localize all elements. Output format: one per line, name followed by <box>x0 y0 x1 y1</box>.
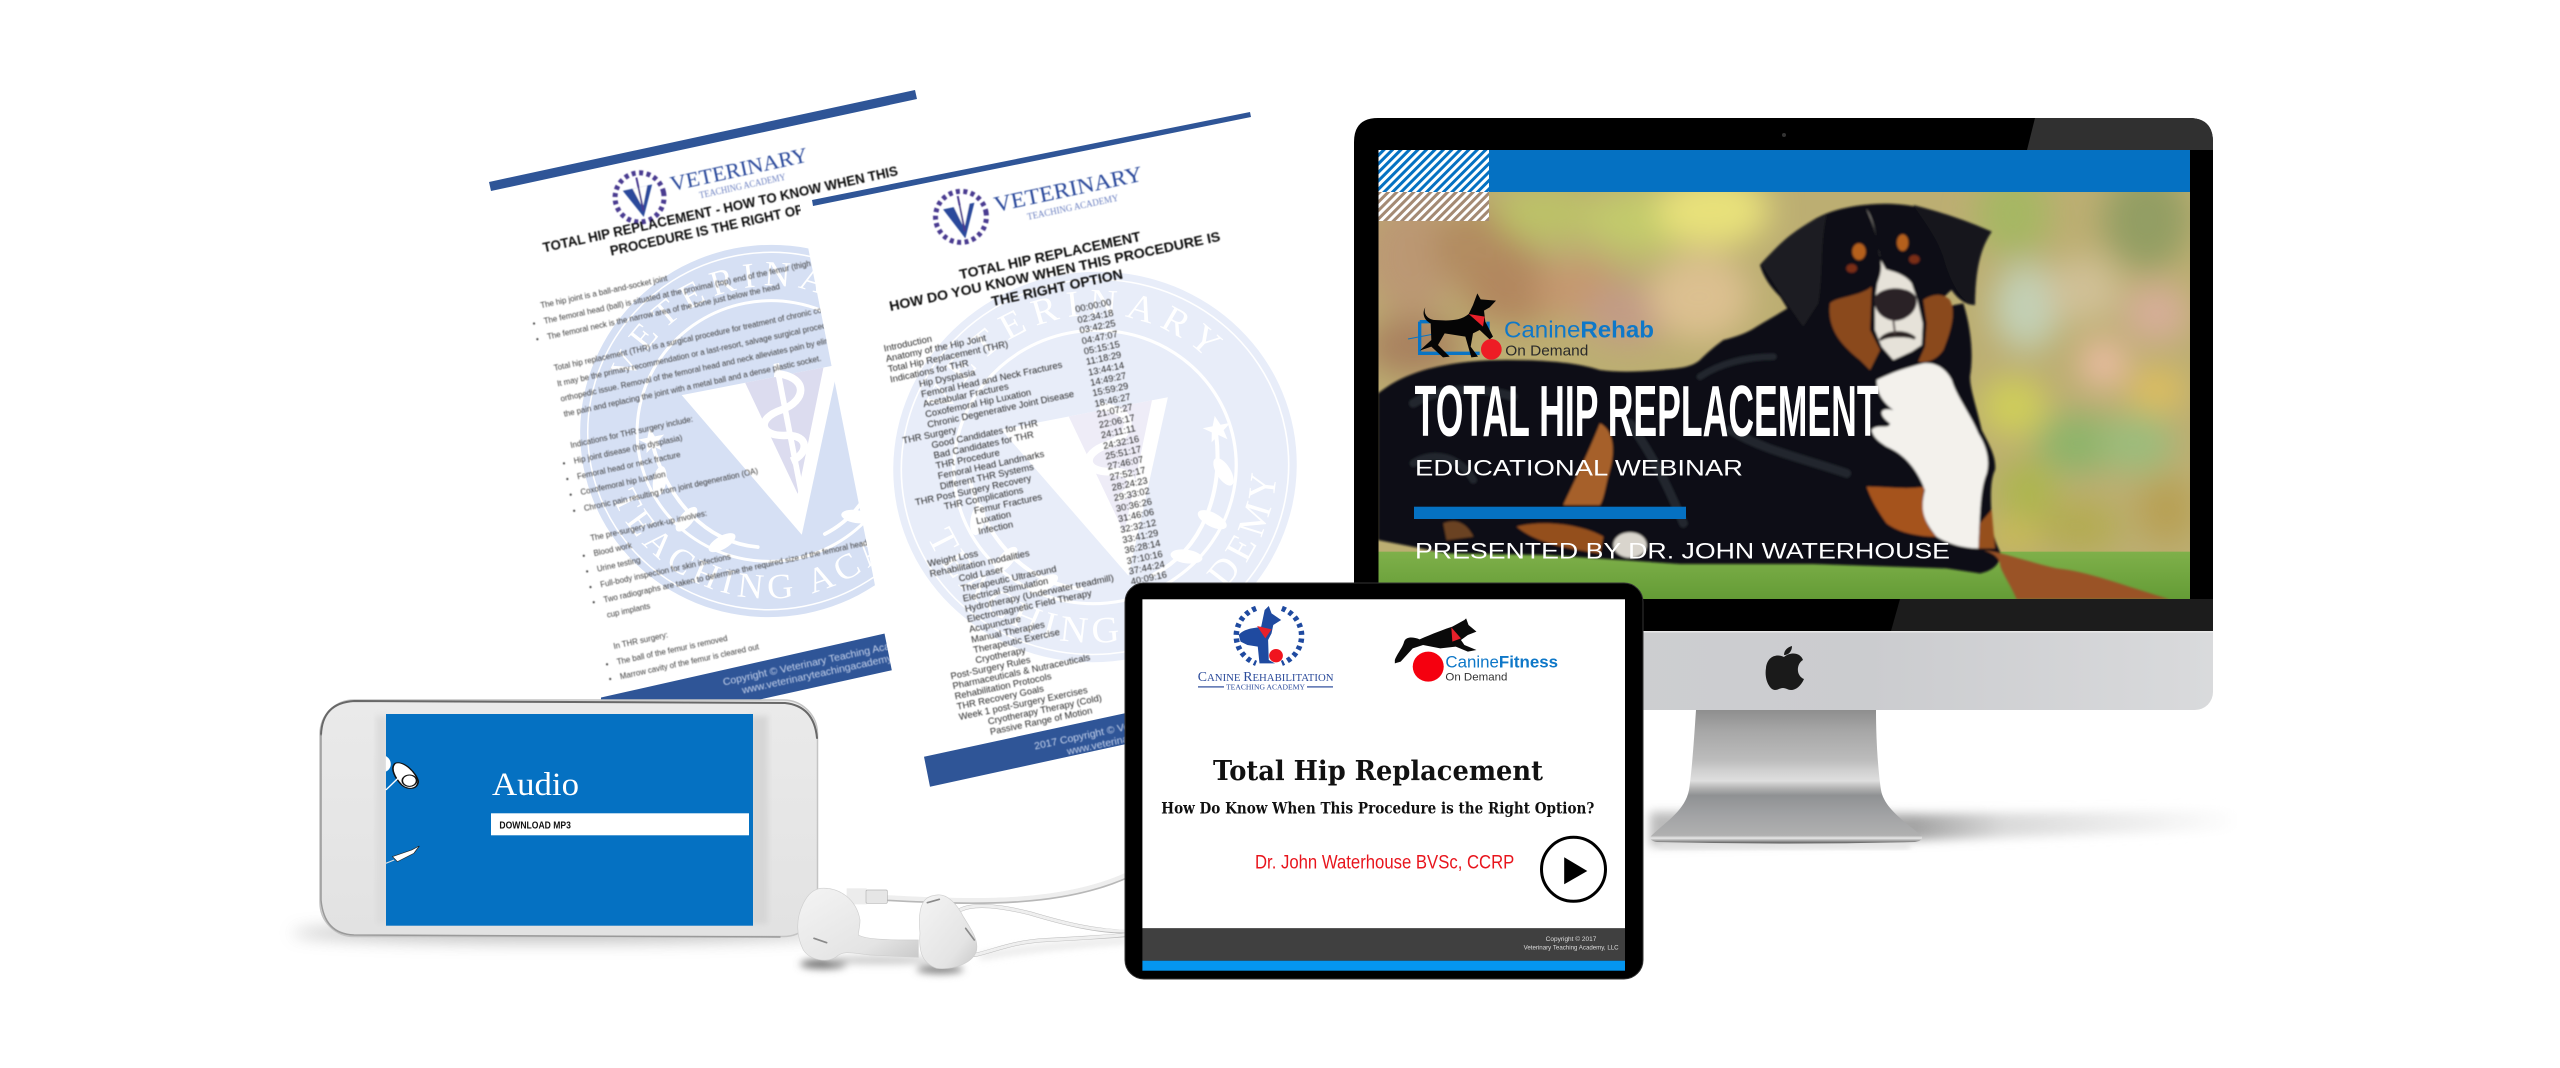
copyright text: Copyright © 2017 <box>1546 935 1597 943</box>
document 2 timecodes: 15:59:29 <box>1091 380 1129 398</box>
document 2 title: HOW DO YOU KNOW WHEN THIS PROCEDURE IS <box>888 228 1222 314</box>
download button: DOWNLOAD MP3 <box>499 820 571 831</box>
monitor stand <box>1651 710 1922 844</box>
CanineRehab logo <box>1408 293 1654 360</box>
document 1 body copy <box>528 227 961 684</box>
document 1 body copy: Hip joint disease (hip dysplasia) <box>573 433 684 466</box>
document 1 body copy: • <box>582 551 586 560</box>
document 1 body copy: the pain and replacing the joint with a metal ball and a dense plastic socket. <box>563 354 822 419</box>
document 1 body copy: • <box>608 674 613 684</box>
document 2 chapter list: Luxation <box>975 508 1012 526</box>
copyright text: Veterinary Teaching Academy, LLC <box>1524 944 1619 951</box>
chest tan <box>1867 487 1937 537</box>
grass <box>1379 552 2190 599</box>
document 1 body copy: • <box>568 490 573 500</box>
document 1 body copy: Two radiographs are taken to determine the required size of the femoral head and <box>603 535 883 605</box>
document 2 chapter list: Indications for THR <box>889 357 970 384</box>
document 1 body copy: • <box>588 582 593 592</box>
document 2 chapter list: Cryotherapy <box>974 644 1027 665</box>
document 2 chapter list: Chronic Degenerative Joint Disease <box>926 388 1075 430</box>
document 2 chapter list: Different THR Systems <box>939 461 1035 491</box>
desktop monitor: TOTAL HIP REPLACEMENT <box>1415 372 1879 452</box>
document 2 chapter list: THR Recovery Goals <box>956 683 1045 712</box>
document 2 chapter list: Femoral Head Landmarks <box>937 448 1045 481</box>
document 1 title: PROCEDURE IS THE RIGHT OP <box>608 201 805 259</box>
monitor chin <box>1354 560 2213 710</box>
document 2 chapter list: THR Procedure <box>935 447 1001 471</box>
logo mark <box>1408 293 1502 360</box>
document 2 chapter list: Bad Candidates for THR <box>932 429 1035 461</box>
eyebrows <box>1852 243 1866 260</box>
document 2 timecodes: 40:09:16 <box>1130 569 1168 587</box>
play button <box>1542 837 1606 901</box>
document 2 timecodes: 27:52:17 <box>1108 464 1146 482</box>
document 1 body copy: • <box>535 334 540 344</box>
presenter line: PRESENTED BY DR. JOHN WATERHOUSE <box>1415 538 1950 563</box>
document 2 timecodes: 29:33:02 <box>1113 485 1151 503</box>
document 1 body copy: The pre-surgery work-up involves: <box>589 509 708 543</box>
tablet with webinar title slide <box>1125 583 1643 979</box>
document 2 timecodes: 33:41:29 <box>1121 527 1159 545</box>
earphones <box>798 874 1128 973</box>
document 2 timecodes: 37:44:24 <box>1128 558 1166 577</box>
document 1 body copy: Full-body inspection for skin infections <box>599 552 732 589</box>
document 2 chapter list: Therapeutic Ultrasound <box>960 563 1057 594</box>
document 1 title: TOTAL HIP REPLACEMENT - HOW TO KNOW WHEN THIS <box>541 163 899 256</box>
apple logo <box>1766 646 1804 690</box>
document 1 body copy: Blood work <box>593 541 633 558</box>
document 2 chapter list: Femur Fractures <box>973 491 1043 516</box>
document 2 chapter list: Femoral Head and Neck Fractures <box>920 358 1063 399</box>
document 2 chapter list: Electromagnetic Field Therapy <box>966 587 1093 624</box>
document 2 title: THE RIGHT OPTION <box>990 266 1124 309</box>
document 1 logo wordmark: VETERINARY <box>668 143 810 196</box>
dog body <box>1378 302 2002 575</box>
right earbud <box>919 895 977 969</box>
document 1 top bar <box>489 90 917 191</box>
logo wordmark: CanineRehab <box>1504 317 1654 343</box>
document 2 chapter list: Weight Loss <box>926 547 979 569</box>
document 2 chapter list: Passive Range of Motion <box>989 704 1093 737</box>
blue top banner <box>1378 150 2190 192</box>
document 1 body copy: • <box>605 660 610 669</box>
presenter name: Dr. John Waterhouse BVSc, CCRP <box>1255 852 1514 873</box>
document 1 footer text: Copyright © Veterinary Teaching Academy LLC <box>722 630 938 689</box>
screen subtitle: EDUCATIONAL WEBINAR <box>1415 456 1743 480</box>
document 2 chapter list: THR Complications <box>943 484 1025 512</box>
document 1 logo emblem <box>610 168 669 227</box>
white blaze and muzzle <box>1866 208 1923 360</box>
white chest <box>1872 363 1988 548</box>
document 1 body copy: • <box>585 567 590 576</box>
document 2 chapter list: Cold Laser <box>958 563 1004 583</box>
document 2 watermark seal: TEACHING ACADEMY <box>930 473 1276 642</box>
smartphone with audio screen <box>292 700 828 942</box>
copyright text <box>1524 935 1619 951</box>
document 2 chapter list: THR Surgery <box>901 424 957 446</box>
document 1 body copy: cup implants <box>606 601 651 620</box>
document 2 chapter list: Acupuncture <box>968 613 1022 635</box>
document 2 chapter list: Coxofemoral Hip Luxation <box>924 386 1032 420</box>
dog figure <box>1378 204 2170 599</box>
document 1 body copy: Indications for THR surgery include: <box>570 415 694 450</box>
document 2 timecodes: 03:42:25 <box>1079 317 1116 336</box>
document 2 chapter list: Electrical Stimulation <box>962 575 1049 604</box>
document 1 body copy: It may be the primary recommendation or a last-resort, salvage surgical procedure for <box>556 316 850 388</box>
document 2 chapter list <box>883 306 1140 743</box>
document 1: total hip replacement notes <box>489 90 938 700</box>
tablet footer bar <box>1142 928 1625 961</box>
document 2 timecodes: 21:07:27 <box>1096 401 1134 419</box>
logo tagline: On Demand <box>1505 343 1588 360</box>
camera dot <box>1782 133 1786 137</box>
document 2 logo subtitle: TEACHING ACADEMY <box>1027 194 1120 223</box>
document 1 body copy: Urine testing <box>596 555 641 574</box>
document 2 chapter list: THR Post Surgery Recovery <box>914 472 1032 507</box>
document 2 timecodes: 31:46:06 <box>1117 506 1155 524</box>
document 2 chapter list: Cryotherapy Therapy (Cold) <box>987 692 1103 727</box>
striped corner accent <box>1378 150 1489 221</box>
document 2 chapter list: Good Candidates for THR <box>930 417 1039 450</box>
document 1 body copy: Marrow cavity of the femur is cleared out <box>619 642 761 681</box>
left ear <box>1762 215 1827 327</box>
document 2 timecodes: 13:44:14 <box>1087 359 1125 378</box>
document 1 watermark seal: VETERINARY <box>610 262 817 371</box>
desktop monitor <box>1354 118 2240 849</box>
phone body <box>320 700 818 936</box>
document 2 footer band <box>924 710 1140 787</box>
phone inner shading <box>376 716 768 924</box>
document 1 body copy: • <box>532 319 537 328</box>
phone screen <box>386 714 753 926</box>
crest subtitle: TEACHING ACADEMY <box>1226 682 1306 692</box>
document 2 footer text: 2017 Copyright © Veterinary Teaching Academy <box>1033 694 1254 753</box>
document 2 chapter list: Pharmaceuticals & Nutraceuticals <box>952 651 1091 691</box>
nose <box>1874 288 1917 321</box>
crest name: CANINE REHABILITATION <box>1198 669 1334 684</box>
document 1 body copy: • <box>572 506 577 515</box>
hind leg tan <box>1563 423 1613 505</box>
document 2 chapter list: Acetabular Fractures <box>922 380 1010 409</box>
document 1 body copy: The ball of the femur is removed <box>616 634 728 667</box>
canine fitness logo <box>1395 618 1558 684</box>
document 1 body copy: The femoral head (ball) is situated at the proximal (top) end of the femur (thigh bone) <box>543 254 834 326</box>
document 2 title: TOTAL HIP REPLACEMENT <box>958 228 1142 282</box>
document 1 body copy: The hip joint is a ball-and-socket joint <box>540 273 669 310</box>
document 2: webinar outline <box>800 112 1297 787</box>
document 1 body copy: Coxofemoral hip luxation <box>580 470 666 497</box>
tan cheeks <box>1830 287 1880 370</box>
document 2 timecodes: 32:32:12 <box>1119 516 1157 535</box>
document 2 timecodes: 37:10:16 <box>1126 548 1164 566</box>
document 2 timecodes: 04:47:07 <box>1081 328 1119 346</box>
document 2 title <box>884 212 1225 330</box>
document 2 timecodes: 14:49:27 <box>1089 370 1127 388</box>
document 1 body copy: Total hip replacement (THR) is a surgical procedure for treatment of chronic coxofemoral <box>553 298 856 373</box>
right ear <box>1913 205 1992 305</box>
document 2 timecodes: 27:46:07 <box>1106 453 1144 472</box>
monitor screen photo: dog in meadow <box>1378 192 2190 599</box>
tablet screen <box>1142 599 1625 928</box>
document 2 timecodes: 18:46:27 <box>1093 391 1131 409</box>
document 2 top bar <box>812 112 1251 206</box>
slide subtitle: How Do Know When This Procedure is the Right Option? <box>1161 798 1594 817</box>
document 2 timecodes: 30:36:26 <box>1115 495 1153 514</box>
document 2 chapter list: Rehabilitation Protocols <box>954 670 1053 702</box>
document 2 chapter list: Therapeutic Exercise <box>972 626 1061 655</box>
front leg <box>1983 550 2170 599</box>
document 2 timecodes: 25:51:17 <box>1104 443 1142 461</box>
document 1 footer band <box>600 633 893 735</box>
document 1 body copy: • <box>591 598 596 607</box>
document 2 timecodes: 28:24:23 <box>1111 474 1149 493</box>
document 2 timecodes: 11:18:29 <box>1085 349 1122 367</box>
document 2 chapter list: Manual Therapies <box>970 618 1046 645</box>
document 2 timecodes: 36:28:14 <box>1123 537 1161 556</box>
earbud illustrations on screen <box>386 756 419 863</box>
document 1 text content <box>506 118 990 684</box>
document 2 chapter list: Anatomy of the Hip Joint <box>885 332 987 364</box>
document 2 timecodes: 05:15:15 <box>1083 338 1121 357</box>
crest <box>1236 606 1302 663</box>
document 2 chapter list: Post-Surgery Rules <box>949 653 1032 681</box>
document 2 timecodes: 24:32:16 <box>1102 433 1140 451</box>
slide title: Total Hip Replacement <box>1213 756 1543 787</box>
document 2 timecodes: 24:11:11 <box>1100 422 1136 440</box>
document 1 watermark seal: TEACHING ACADEMY <box>614 486 871 598</box>
document 2 chapter list: Total Hip Replacement (THR) <box>887 338 1009 374</box>
monitor shadow <box>1650 810 2240 849</box>
document 2 chapter list: Infection <box>977 518 1014 537</box>
document 2 footer text: www.veterinaryteachingacademy.com <box>1065 710 1240 758</box>
document 1 body copy: • <box>565 475 570 484</box>
document 2 chapter list: Rehabilitation modalities <box>929 547 1031 579</box>
document 2 logo wordmark: VETERINARY <box>992 161 1144 217</box>
document 2 watermark seal: VETERINARY <box>924 290 1223 404</box>
document 1 body copy: In THR surgery: <box>613 630 669 651</box>
canine rehabilitation logo <box>1198 606 1334 692</box>
document 2 logo emblem <box>931 187 991 247</box>
leaping dog and ball <box>1395 618 1476 682</box>
fur sheen <box>1413 357 1847 523</box>
download button <box>491 813 749 835</box>
monitor black bezel <box>1354 118 2213 631</box>
earbud vents <box>814 899 974 943</box>
tablet blue strip <box>1142 961 1625 971</box>
bezel bottom reflection <box>1891 599 2213 631</box>
rear paw tan <box>1517 523 1603 553</box>
left earbud <box>798 888 918 960</box>
document 2 chapter list: Hip Dysplasia <box>918 366 977 389</box>
blue accent bar <box>1414 507 1686 519</box>
document 1 body copy: Chronic pain resulting from joint degeneration (OA) <box>583 466 759 513</box>
document 1 body copy: The femoral neck is the narrow area of the bone just below the head <box>546 282 781 341</box>
phone shadow <box>292 924 828 942</box>
tablet body <box>1125 583 1643 979</box>
document 1 body copy: • <box>562 459 567 468</box>
document 1 logo subtitle: TEACHING ACADEMY <box>698 172 787 200</box>
document 2 watermark seal <box>893 272 1297 662</box>
bezel top reflection <box>2027 118 2213 150</box>
earphone cables <box>887 874 1128 955</box>
document 2 timecodes <box>1074 296 1168 587</box>
document 2 page <box>800 106 1262 790</box>
earphone shadow <box>800 940 1127 973</box>
document 1 body copy: orthopedic issue. Removal of the femoral head and neck alleviates pain by eliminating bone contact <box>560 321 901 404</box>
mouth <box>1880 332 1915 340</box>
dog head <box>1760 204 1992 370</box>
document 2 chapter list: Introduction <box>883 333 933 354</box>
white paw <box>1613 532 1647 558</box>
tagline: On Demand <box>1445 672 1507 684</box>
document 2 timecodes: 00:00:00 <box>1074 296 1112 315</box>
chin highlight line <box>1354 631 2213 632</box>
document 2 chapter list: Week 1 post-Surgery Exercises <box>958 684 1089 722</box>
document 2 timecodes: 02:34:18 <box>1076 307 1114 325</box>
eyes <box>1846 264 1857 273</box>
screen heading: Audio <box>492 767 579 803</box>
blurred garden background <box>1361 170 2197 553</box>
document 2 timecodes: 22:06:17 <box>1098 412 1136 430</box>
document 1 footer text: www.veterinaryteachingacademy.com <box>740 648 915 697</box>
document 2 text content <box>856 140 1308 743</box>
cable connector <box>847 888 887 904</box>
document 1 watermark seal <box>580 244 875 618</box>
document 2 chapter list: Hydrotherapy (Underwater treadmill) <box>964 572 1115 614</box>
rear hair <box>1443 521 1473 540</box>
phone edge lines <box>321 701 817 937</box>
wordmark: CanineFitness <box>1445 652 1558 671</box>
document 1 body copy: Femoral head or neck fracture <box>576 450 682 482</box>
